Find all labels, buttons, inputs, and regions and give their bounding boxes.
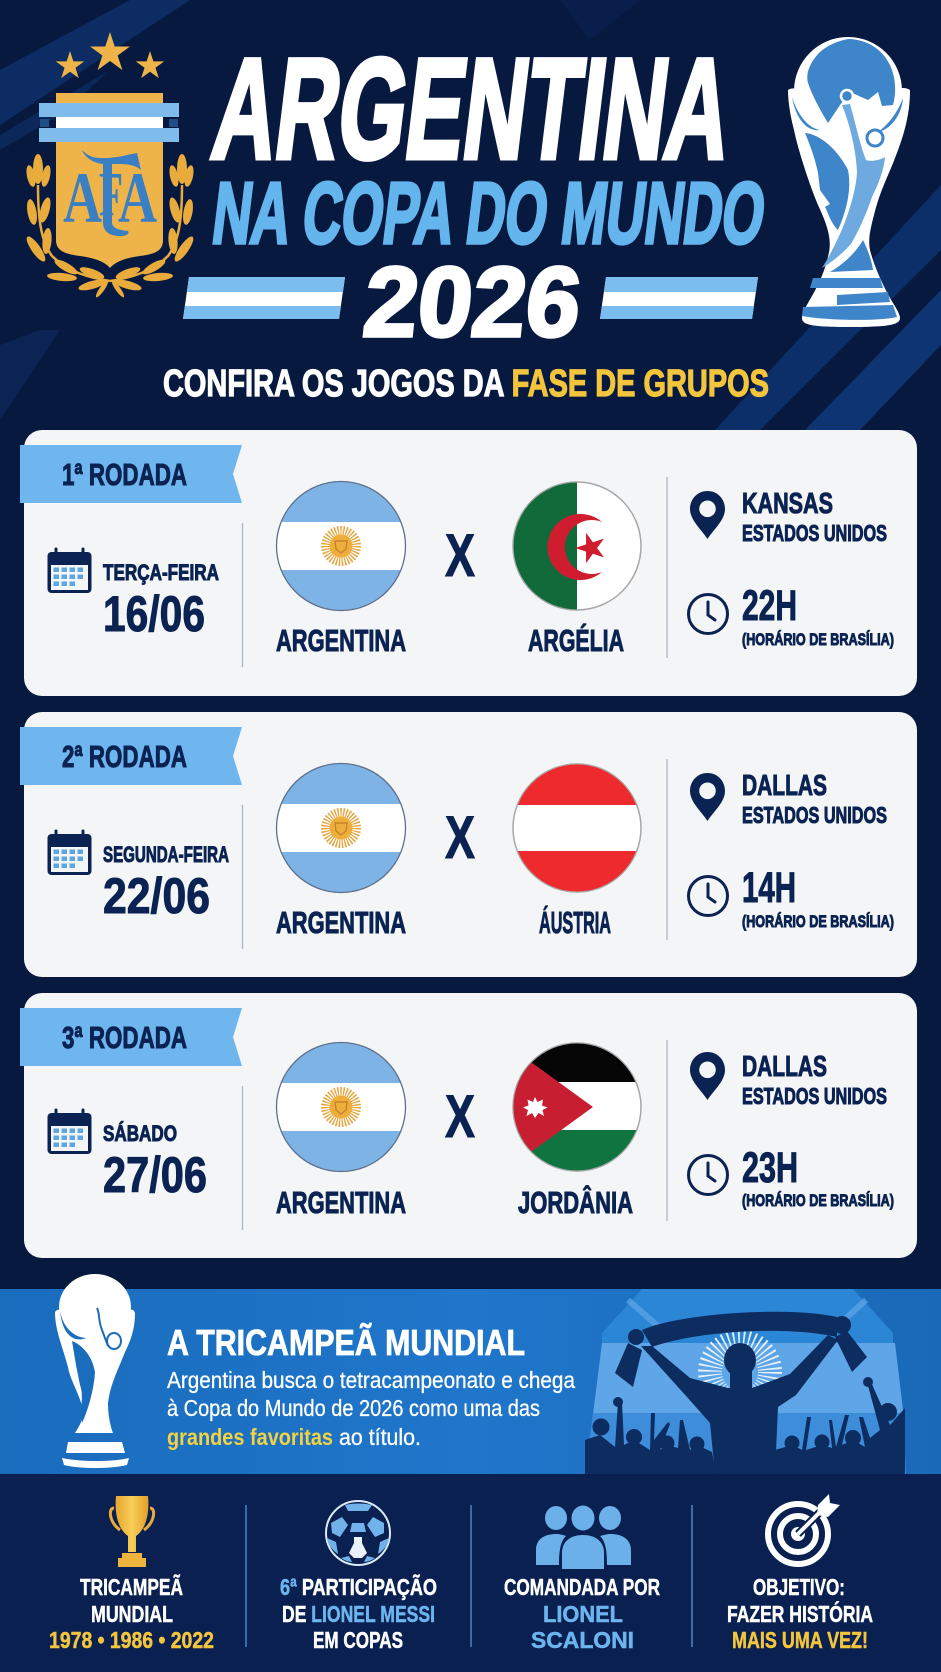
date: SÁBADO <box>103 1121 177 1146</box>
versus X: X <box>445 522 475 589</box>
panel: tricampea band <box>0 1274 941 1474</box>
flag stripe left <box>183 277 345 319</box>
time: (HORÁRIO DE BRASÍLIA) <box>742 630 894 649</box>
date: 22/06 <box>103 868 210 924</box>
label: Algeria: ARGÉLIA <box>528 623 624 658</box>
location: KANSAS <box>742 488 833 520</box>
text block: ao título. <box>339 1424 421 1450</box>
stat: tricampea: TRICAMPEÃ <box>80 1573 183 1600</box>
trophy globe <box>807 39 895 123</box>
stat: scaloni: LIONEL <box>543 1601 623 1627</box>
stadium backdrop <box>585 1289 906 1474</box>
stat: tricampea: 1978 • 1986 • 2022 <box>49 1627 214 1653</box>
stat: tricampea: MUNDIAL <box>91 1601 173 1627</box>
stat: objetivo: MAIS UMA VEZ! <box>732 1627 868 1653</box>
time: 22H <box>742 582 797 630</box>
label: Austria: ÁUSTRIA <box>539 905 611 940</box>
date <box>48 1110 207 1203</box>
icon: three stars <box>56 32 164 78</box>
panel: round 2 <box>20 712 917 977</box>
location: DALLAS <box>742 770 827 802</box>
ribbon: 2a rodada: 2ª RODADA <box>62 739 187 774</box>
stat: objetivo <box>727 1494 873 1653</box>
flag: Jordan <box>513 1043 641 1171</box>
AFA monogram <box>63 150 157 238</box>
time: 23H <box>742 1144 798 1192</box>
title <box>205 29 771 358</box>
time <box>688 864 894 931</box>
time: (HORÁRIO DE BRASÍLIA) <box>742 912 894 931</box>
label: Argentina: ARGENTINA <box>276 623 406 658</box>
versus X: X <box>445 1083 475 1150</box>
AFA monogram: A <box>63 158 102 238</box>
label: Argentina: ARGENTINA <box>276 1185 406 1220</box>
heading: A TRICAMPEÃ MUNDIAL <box>167 1321 525 1363</box>
text block: Argentina busca o tetracampeonato e chega <box>167 1367 575 1393</box>
stat: objetivo: OBJETIVO: <box>753 1574 845 1600</box>
icon: crest stripes <box>39 103 179 142</box>
stat: messi <box>280 1501 437 1653</box>
icon: World Cup trophy <box>788 37 910 327</box>
date: TERÇA-FEIRA <box>103 560 219 585</box>
icon: target with arrow <box>768 1494 840 1564</box>
location <box>690 770 887 828</box>
time <box>688 582 894 649</box>
illustration: fans with scarf <box>585 1312 905 1474</box>
emblem: AFA crest <box>24 32 196 299</box>
flag stripe right <box>600 277 758 319</box>
versus X: X <box>445 804 475 871</box>
icon: soccer ball <box>326 1501 390 1565</box>
flag: Algeria <box>513 482 641 610</box>
stat: scaloni: SCALONI <box>531 1627 634 1653</box>
date <box>48 831 229 924</box>
time: (HORÁRIO DE BRASÍLIA) <box>742 1191 894 1210</box>
icon: white trophy <box>55 1274 135 1468</box>
AFA monogram: F <box>99 161 123 229</box>
icon: people <box>536 1506 631 1569</box>
time: 14H <box>742 864 796 912</box>
text block <box>167 1367 575 1450</box>
date: SEGUNDA-FEIRA <box>103 842 229 867</box>
text block: grandes favoritas <box>167 1424 333 1450</box>
flag: Austria <box>513 764 641 892</box>
stat: scaloni <box>504 1506 660 1653</box>
stat: messi: EM COPAS <box>313 1627 403 1653</box>
time <box>688 1144 894 1210</box>
location <box>690 1051 887 1109</box>
panel: round 3 <box>20 993 917 1258</box>
ribbon: 1a rodada <box>20 445 242 503</box>
ribbon: 1a rodada: 1ª RODADA <box>62 457 187 492</box>
location <box>690 488 887 546</box>
ribbon: 3a rodada <box>20 1008 242 1066</box>
location: DALLAS <box>742 1051 827 1083</box>
icon: laurel wreath <box>24 154 196 299</box>
flag: Argentina <box>276 763 406 894</box>
heading: confira os jogos: CONFIRA OS JOGOS DA FASE DE GRUPOS <box>163 363 769 405</box>
date: 27/06 <box>103 1147 207 1203</box>
panel: round 1 <box>20 430 917 696</box>
flag: Argentina <box>276 481 406 612</box>
stat: objetivo: FAZER HISTÓRIA <box>727 1600 873 1627</box>
dividers <box>246 1505 692 1647</box>
icon: gold trophy <box>110 1496 154 1567</box>
stat: scaloni: COMANDADA POR <box>504 1574 660 1600</box>
flag: Argentina <box>276 1042 406 1173</box>
label: Argentina: ARGENTINA <box>276 905 406 940</box>
ribbon: 3a rodada: 3ª RODADA <box>62 1020 187 1055</box>
icon: shield <box>56 93 163 268</box>
trophy base <box>802 278 897 320</box>
label: Jordan: JORDÂNIA <box>518 1184 633 1220</box>
text block: à Copa do Mundo de 2026 como uma das <box>167 1395 540 1421</box>
date: 16/06 <box>103 586 205 642</box>
stat: messi: 6ª PARTICIPAÇÃO <box>280 1573 437 1600</box>
ribbon: 2a rodada <box>20 727 242 785</box>
year 2026: 2026 <box>359 247 586 358</box>
AFA monogram: A <box>118 158 157 238</box>
stat: tricampea <box>49 1496 214 1653</box>
date <box>48 549 219 642</box>
stat: messi: DE LIONEL MESSI <box>282 1601 435 1627</box>
